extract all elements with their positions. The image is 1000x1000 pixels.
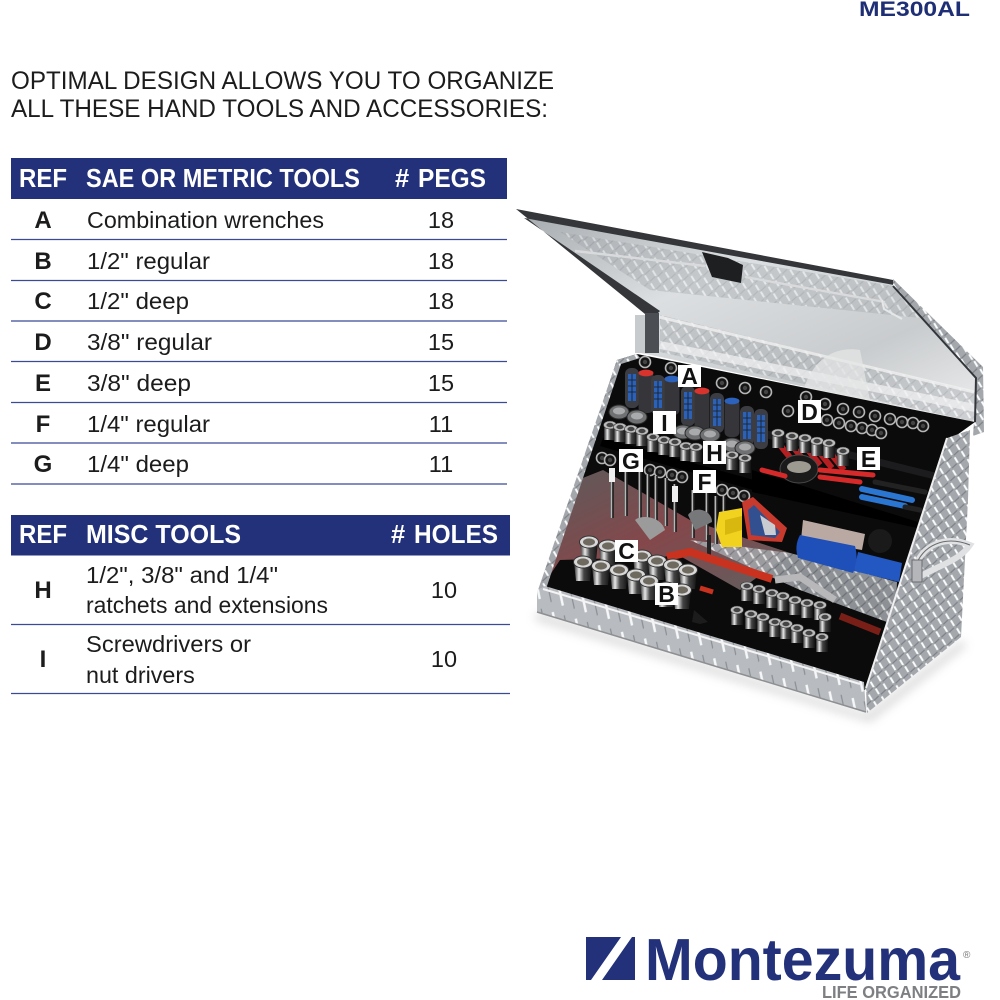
row F: 1/4" regular — [87, 411, 210, 437]
row A: 18 — [428, 207, 454, 233]
box interior — [540, 354, 975, 690]
table: misc tools — [11, 515, 510, 694]
row C — [34, 288, 454, 315]
logo mark — [586, 937, 635, 980]
row C: 1/2" deep — [87, 288, 189, 314]
row D — [34, 329, 454, 356]
row I: I — [40, 646, 46, 673]
table header: misc — [11, 515, 510, 556]
row H: H — [34, 577, 52, 604]
row B: B — [34, 248, 52, 275]
row A: A — [34, 207, 52, 234]
row E: E — [35, 370, 51, 397]
label A: A — [681, 363, 698, 389]
Montezuma logo — [586, 927, 971, 1000]
table header: misc: # — [391, 521, 405, 549]
pipe wrench — [667, 552, 835, 600]
table header: SAE: # — [395, 165, 409, 193]
registered mark: ® — [963, 950, 971, 961]
table header: misc: MISC TOOLS — [86, 521, 241, 549]
row F — [36, 411, 453, 438]
blue cylinders — [796, 535, 902, 582]
table header: misc: HOLES — [414, 521, 498, 549]
row G: 11 — [429, 451, 453, 477]
row E — [35, 370, 454, 397]
row G — [34, 451, 453, 478]
red and blue case — [742, 497, 787, 542]
row H: 10 — [431, 577, 457, 603]
table header: SAE — [11, 158, 507, 199]
table header: SAE: PEGS — [418, 165, 486, 193]
label H: H — [706, 440, 723, 466]
row F: 11 — [429, 411, 453, 437]
1/4 sockets and extensions — [596, 452, 750, 560]
open lid — [516, 209, 984, 436]
label I: I — [661, 410, 668, 436]
front strip — [537, 586, 866, 712]
tape measure — [716, 508, 742, 547]
left side frame — [538, 354, 640, 592]
floor shadow — [535, 612, 966, 722]
label I — [653, 410, 676, 436]
bit box — [801, 520, 865, 550]
row H: 1/2", 3/8" and 1/4" — [86, 562, 278, 588]
pliers — [762, 470, 925, 510]
ratchets and nut driver sockets — [604, 405, 755, 473]
label G: G — [622, 448, 640, 474]
electrical tape roll — [780, 455, 818, 483]
row F: F — [36, 411, 50, 438]
heading — [11, 68, 554, 123]
toolbox photo illustration — [516, 209, 984, 722]
label C: C — [618, 538, 635, 564]
row D: 15 — [428, 329, 454, 355]
row A — [34, 207, 454, 234]
row H: ratchets and extensions — [86, 592, 328, 618]
label B: B — [658, 581, 675, 607]
row A: Combination wrenches — [87, 207, 324, 233]
row D: 3/8" regular — [87, 329, 212, 355]
row C: C — [34, 288, 52, 315]
shelves — [600, 430, 945, 528]
side handle — [912, 541, 970, 582]
1/2 inch sockets — [574, 536, 708, 624]
row E: 15 — [428, 370, 454, 396]
row E: 3/8" deep — [87, 370, 191, 396]
table header: SAE: SAE OR METRIC TOOLS — [86, 165, 360, 193]
table: SAE or metric tools — [11, 158, 507, 484]
label D: D — [801, 399, 818, 425]
row C: 18 — [428, 288, 454, 314]
row B: 18 — [428, 248, 454, 274]
heading: ALL THESE HAND TOOLS AND ACCESSORIES: — [11, 96, 548, 123]
row D: D — [34, 329, 52, 356]
wordmark: Montezuma — [645, 927, 961, 993]
black knob — [868, 529, 892, 553]
row I: Screwdrivers or — [86, 631, 251, 657]
row B: 1/2" regular — [87, 248, 210, 274]
table header: misc: REF — [19, 521, 67, 549]
screwdrivers — [625, 368, 768, 449]
row G: G — [34, 451, 52, 478]
row I: nut drivers — [86, 662, 195, 688]
row I — [40, 631, 457, 688]
reflective floor — [550, 470, 897, 625]
lower right sockets — [730, 582, 880, 652]
right side panel — [866, 430, 970, 713]
table header: SAE: REF — [19, 165, 67, 193]
row B — [34, 248, 454, 275]
heading: OPTIMAL DESIGN ALLOWS YOU TO ORGANIZE — [11, 68, 554, 95]
deep 3/8 sockets on red pliers — [772, 429, 850, 470]
row G: 1/4" deep — [87, 451, 189, 477]
top sockets and rings — [640, 356, 928, 438]
row I: 10 — [431, 646, 457, 672]
label F: F — [697, 469, 712, 495]
label E: E — [861, 446, 876, 472]
row H — [34, 562, 457, 618]
label E — [857, 446, 880, 472]
label F — [693, 469, 716, 495]
